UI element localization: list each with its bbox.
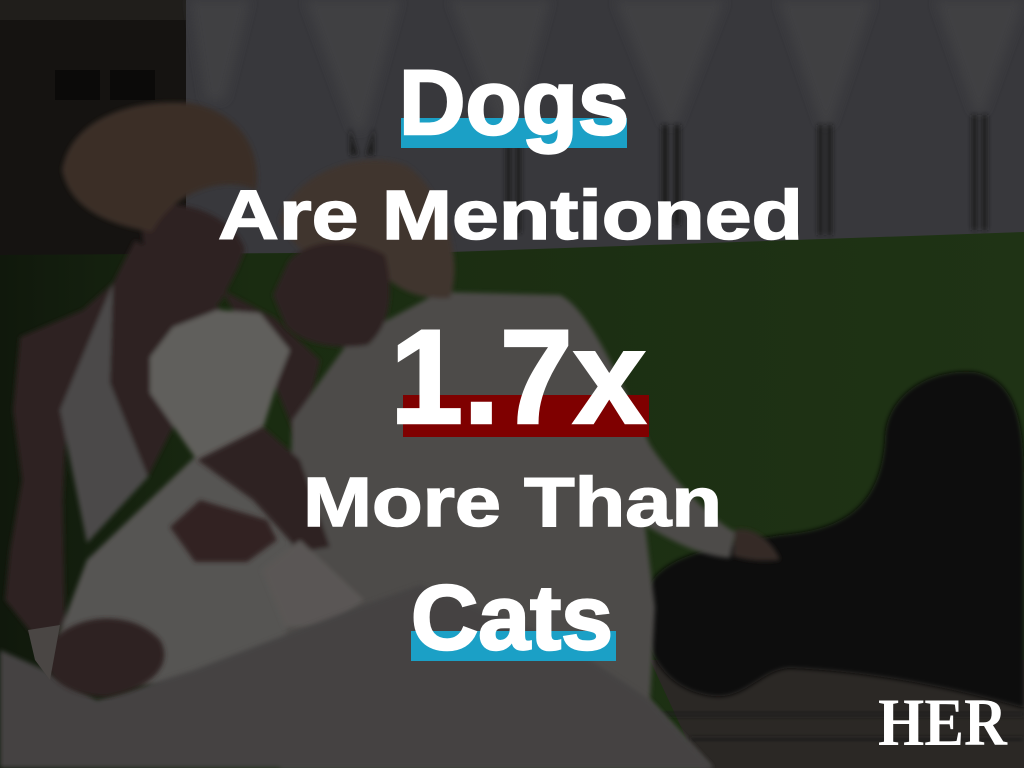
left woman	[5, 102, 320, 690]
holding hand	[170, 500, 277, 562]
woman chest and neck	[110, 240, 230, 477]
highlight bar: Cats	[411, 631, 616, 661]
heading: Cats: Cats	[411, 567, 613, 669]
statistic: 1.7x: 1.7x	[390, 303, 646, 452]
right woman	[170, 160, 780, 768]
heading: Are Mentioned: Are Mentioned	[218, 176, 803, 254]
woman face	[140, 205, 245, 312]
woman arm and shoulder	[5, 283, 113, 650]
lawn	[0, 232, 1024, 768]
highlight bar: Dogs	[401, 118, 627, 148]
shirt	[280, 292, 735, 768]
wall and curtains	[0, 0, 1024, 260]
heading: Dogs: Dogs	[399, 52, 629, 154]
hand on black dog	[733, 529, 780, 561]
black dog	[644, 372, 1024, 708]
wooden deck	[650, 660, 1024, 768]
white dog body	[58, 455, 320, 690]
woman dress	[60, 283, 148, 543]
hair	[280, 160, 454, 298]
heading: More Than: More Than	[303, 463, 722, 541]
white dog head	[150, 310, 290, 470]
highlight bar: 1.7x	[403, 395, 649, 437]
lower hand	[44, 618, 164, 697]
right shoulder	[222, 290, 320, 447]
logo: HER: HER	[878, 684, 1008, 760]
holding arm	[197, 427, 330, 552]
face	[273, 242, 390, 347]
sleeve cuff	[262, 540, 364, 627]
dress skirt	[0, 585, 713, 768]
woman hair	[62, 102, 257, 232]
bracelet	[28, 625, 60, 680]
